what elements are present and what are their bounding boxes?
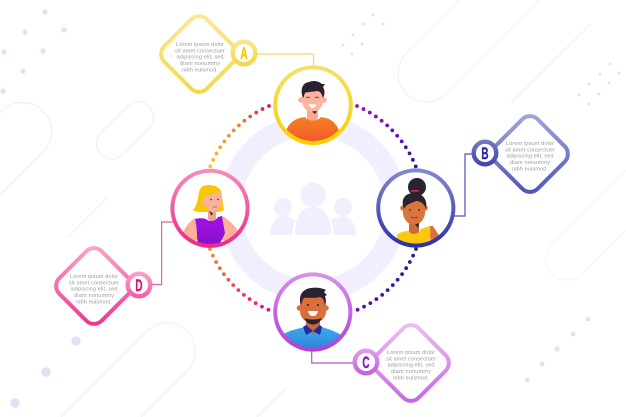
- text block C: sit amet consectuer: [386, 356, 436, 362]
- text block B: Lorem ipsum dolor: [506, 141, 554, 147]
- letter C: C: [362, 353, 370, 372]
- text block A: nibh euismod.: [182, 68, 218, 74]
- text block D: adipiscing elit, sed: [70, 287, 118, 293]
- avatar ring B: [378, 170, 453, 246]
- badge C: [355, 351, 377, 373]
- text block B: nibh euismod.: [512, 166, 548, 172]
- text block B: [505, 141, 555, 172]
- avatar B: woman with hair bun: [378, 170, 454, 250]
- text block A: adipiscing elit, sed: [176, 55, 224, 61]
- badge A: [233, 42, 255, 64]
- dotted connection ring: [210, 106, 416, 310]
- text block B: adipiscing elit, sed: [506, 154, 554, 160]
- letter B: B: [481, 144, 489, 163]
- text block D: diam nonummy: [74, 293, 114, 299]
- text block A: diam nonummy: [180, 61, 220, 67]
- letter A: A: [240, 44, 248, 63]
- badge D: [128, 274, 150, 296]
- avatar ring D: [172, 171, 248, 246]
- text block A: sit amet consectuer: [175, 48, 225, 54]
- text block B: sit amet consectuer: [505, 147, 555, 153]
- icon: group of people: [270, 182, 356, 235]
- avatar A: man in orange shirt: [275, 67, 351, 146]
- avatar D: blonde woman in purple dress: [172, 170, 248, 247]
- avatar C: man in blue shirt: [275, 274, 351, 352]
- panel: B: [474, 112, 572, 196]
- diamond D: [52, 244, 136, 328]
- diamond C: [369, 321, 453, 405]
- panel: A: [157, 12, 255, 96]
- panel: C: [355, 321, 453, 405]
- central lavender ring: [230, 125, 396, 291]
- avatar ring A: [275, 67, 351, 143]
- connector lines: [150, 54, 473, 363]
- text block A: [175, 42, 225, 74]
- text block D: nibh euismod.: [76, 300, 112, 306]
- text block C: Lorem ipsum dolor: [387, 350, 435, 356]
- text block D: [69, 274, 119, 306]
- text block D: sit amet consectuer: [69, 280, 119, 286]
- text block C: adipiscing elit, sed: [388, 363, 434, 369]
- diamond B: [488, 112, 572, 196]
- text block D: Lorem ipsum dolor: [70, 274, 118, 280]
- text block C: [386, 350, 436, 382]
- avatar ring C: [275, 274, 350, 350]
- text block C: diam nonummy: [391, 369, 431, 375]
- letter D: D: [135, 276, 143, 295]
- text block A: Lorem ipsum dolor: [176, 42, 224, 48]
- panel: D: [52, 244, 150, 328]
- text block B: diam nonummy: [510, 160, 550, 166]
- badge B: [474, 142, 496, 164]
- diamond A: [157, 12, 241, 96]
- text block C: nibh euismod.: [393, 376, 429, 382]
